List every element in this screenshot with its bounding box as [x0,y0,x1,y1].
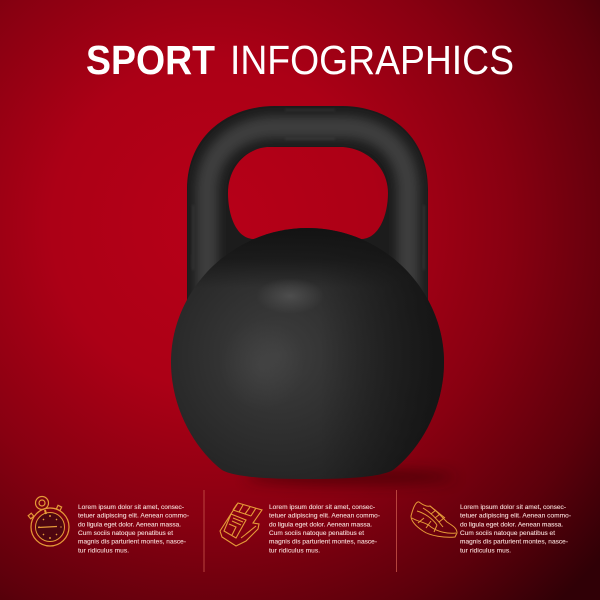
title [86,37,514,83]
text block 3: Cum sociis natoque penatibus et [460,530,555,537]
text block 1 [78,504,189,554]
icon: glove [220,503,262,546]
icon: running shoe [411,502,457,537]
highlights [266,282,314,308]
text block 2 [269,504,380,554]
text block 1: do ligula eget dolor. Aenean massa. [78,521,181,528]
icon: stopwatch [28,496,69,546]
text block 3: tur ridiculus mus. [460,547,511,554]
text block 2: magnis dis parturient montes, nasce- [269,539,377,546]
text block 1: tur ridiculus mus. [78,547,129,554]
text block 3: Lorem ipsum dolor sit amet, consec- [460,504,566,511]
text block 3: tetuer adipiscing elit. Aenean commo- [460,513,571,520]
dividers [204,490,396,572]
text block 2: Cum sociis natoque penatibus et [269,530,364,537]
text block 3: magnis dis parturient montes, nasce- [460,539,568,546]
title: SPORT [86,37,215,83]
text block 2: tetuer adipiscing elit. Aenean commo- [269,513,380,520]
floor shadow [245,470,455,484]
text block 1: Lorem ipsum dolor sit amet, consec- [78,504,184,511]
text block 1: magnis dis parturient montes, nasce- [78,539,186,546]
text block 3: do ligula eget dolor. Aenean massa. [460,521,563,528]
text block 1: tetuer adipiscing elit. Aenean commo- [78,513,189,520]
text block 3 [460,504,571,554]
text block 1: Cum sociis natoque penatibus et [78,530,173,537]
text block 2: Lorem ipsum dolor sit amet, consec- [269,504,375,511]
text block 2: do ligula eget dolor. Aenean massa. [269,521,372,528]
right side shade [380,294,444,474]
ball top shade [210,228,370,274]
text block 2: tur ridiculus mus. [269,547,320,554]
kettlebell [165,100,455,484]
handle [187,106,428,300]
title: INFOGRAPHICS [230,37,514,83]
ball [165,222,450,484]
